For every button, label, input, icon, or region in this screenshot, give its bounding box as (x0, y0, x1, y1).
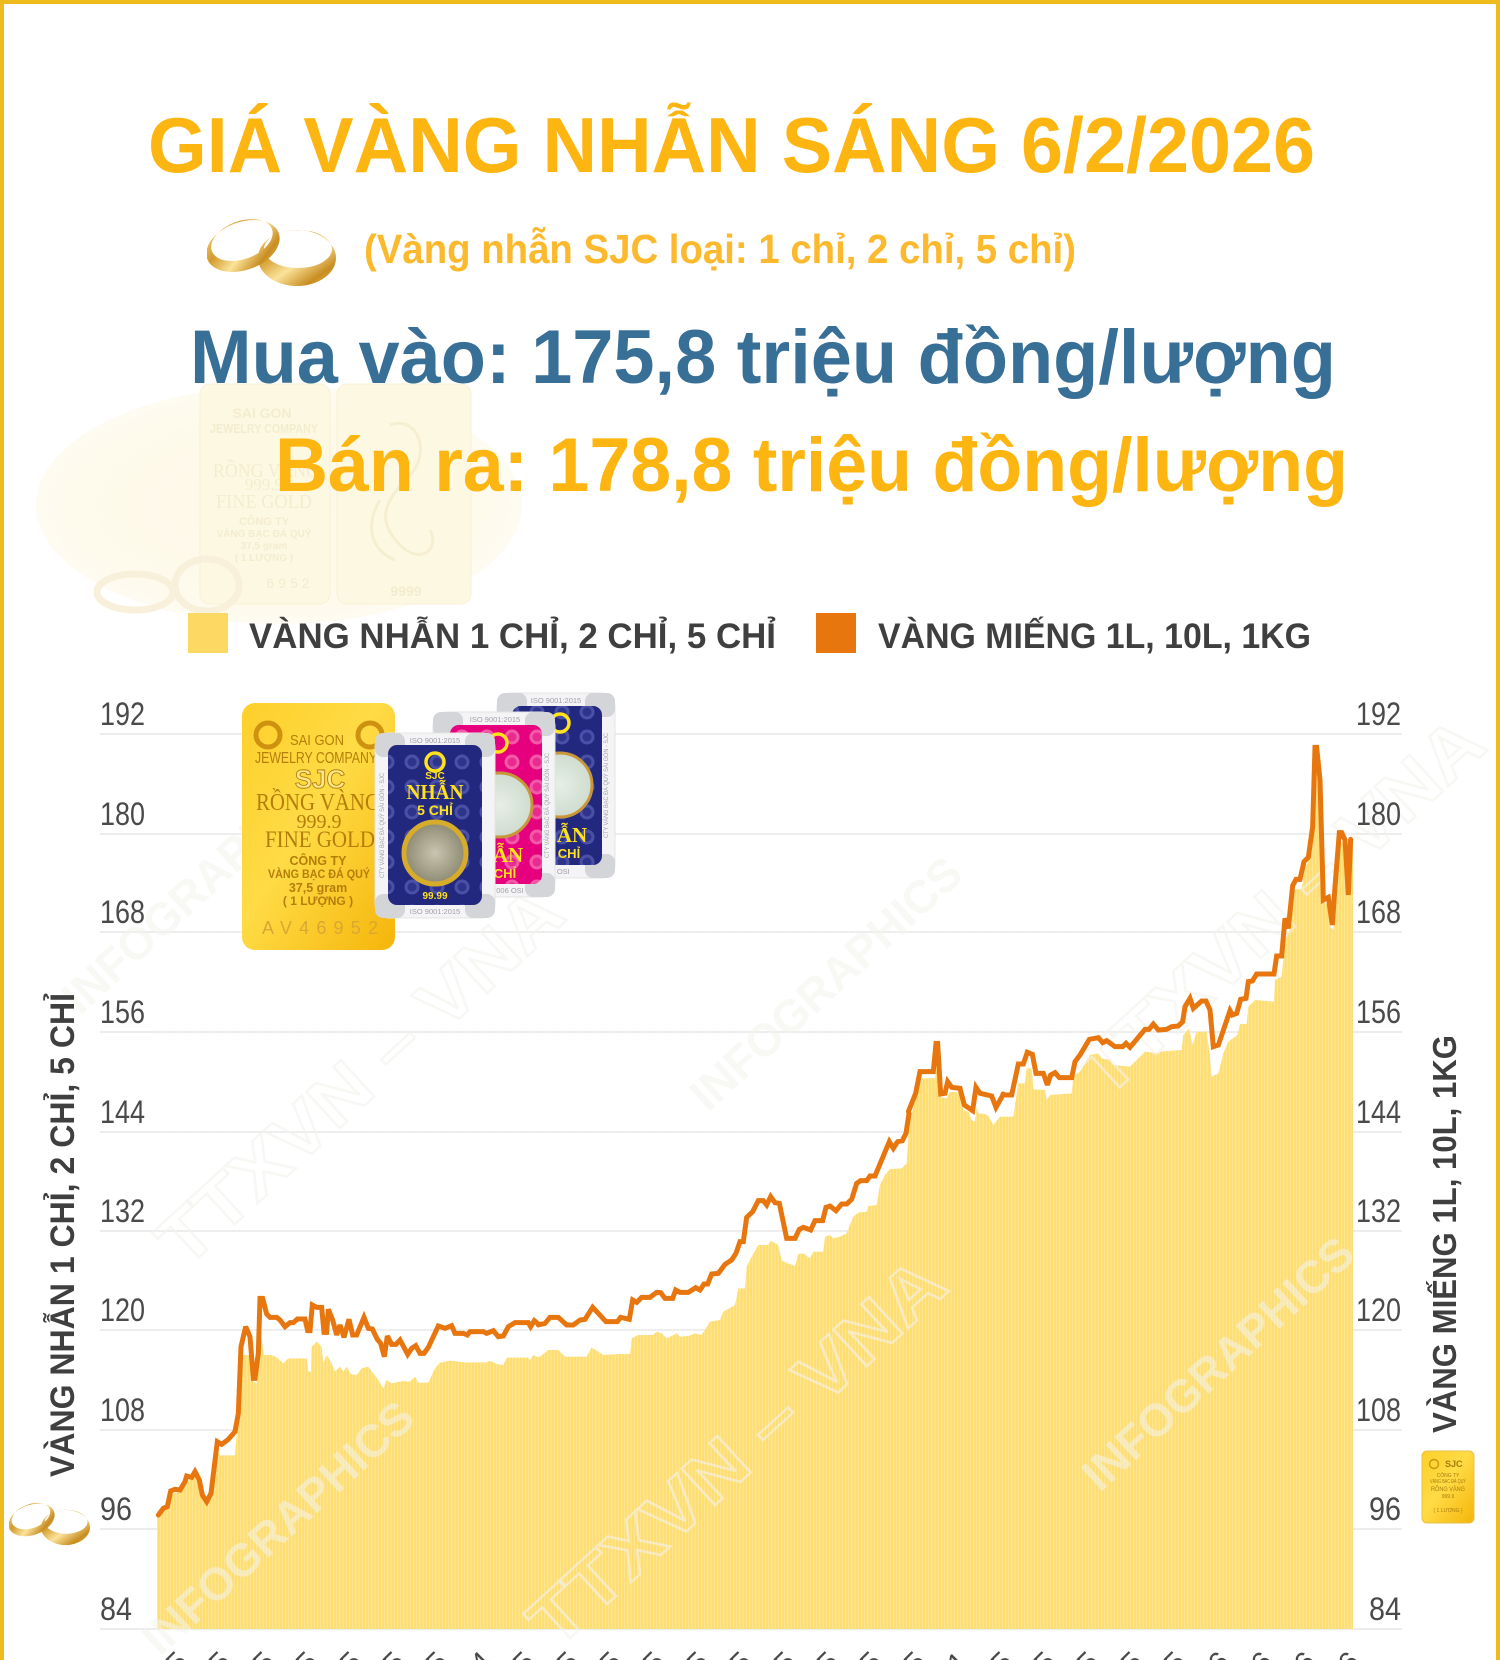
left axis ticks: 120 (100, 1292, 145, 1328)
front ring card 5 chỉ (navy) (375, 733, 495, 918)
legend label: ring gold: VÀNG NHẪN 1 CHỈ, 2 CHỈ, 5 CHỈ (249, 616, 776, 656)
middle ring card (pink): CHỈ (494, 866, 517, 881)
gold bar SJC: SJC (295, 764, 346, 794)
grid lines (100, 734, 1402, 1629)
left axis ticks: 132 (100, 1193, 145, 1229)
gold bar SJC: SAI GON (290, 732, 344, 749)
back ring card (navy): 006 OSI (542, 867, 570, 876)
gold bar SJC: VÀNG BẠC ĐÁ QUÝ (268, 866, 370, 881)
left axis ticks: 156 (100, 994, 145, 1030)
watermarks: INFOGRAPHICS (1072, 1226, 1364, 1500)
right axis ticks: 96 (1369, 1491, 1401, 1527)
legend label: bar gold: VÀNG MIẾNG 1L, 10L, 1KG (878, 616, 1311, 656)
left axis ticks: 144 (100, 1094, 145, 1130)
buy price: Mua vào: 175,8 triệu đồng/lượng (190, 315, 1336, 400)
right axis ticks: 84 (1369, 1591, 1401, 1627)
icon: small gold bar: CÔNG TY (1437, 1472, 1460, 1479)
watermarks: TTXVN – VNA (513, 1242, 961, 1660)
front ring card 5 chỉ (navy): SJC (425, 771, 445, 782)
watermarks: INFOGRAPHICS (680, 846, 972, 1120)
middle ring card (pink): ẪN (493, 842, 523, 867)
gold bar SJC: JEWELRY COMPANY (255, 750, 377, 767)
gold bar SJC: ( 1 LƯỢNG ) (283, 894, 353, 908)
icon: small gold bar: VÀNG BẠC ĐÁ QUÝ (1430, 1478, 1467, 1485)
faded background oval with gold bars and rings: ( 1 LƯỢNG ) (235, 553, 293, 564)
right axis ticks: 144 (1356, 1094, 1401, 1130)
icon: small gold bar (1422, 1451, 1474, 1523)
right axis ticks: 168 (1356, 894, 1401, 930)
right axis ticks: 192 (1356, 696, 1401, 732)
x axis labels (cropped at the page edge) (160, 1646, 1367, 1660)
gold bar SJC: 999.9 (296, 811, 342, 833)
faded background oval with gold bars and rings: 37,5 gram (241, 541, 287, 552)
middle ring card (pink): 006 OSI (496, 886, 524, 895)
back ring card (navy): ẪN (557, 822, 587, 847)
faded background oval with gold bars and rings: SAI GON (232, 405, 292, 421)
faded background oval with gold bars and rings: RỒNG VÀNG (213, 458, 319, 482)
legend swatch: bar gold (816, 613, 856, 653)
left axis ticks: 168 (100, 894, 145, 930)
faded background oval with gold bars and rings: 999.9 (245, 475, 283, 494)
icon: gold rings (199, 210, 336, 286)
line series: bar gold (158, 747, 1351, 1515)
right axis ticks: 120 (1356, 1292, 1401, 1328)
left axis ticks: 84 (100, 1591, 132, 1627)
subtitle: (Vàng nhẫn SJC loại: 1 chỉ, 2 chỉ, 5 chỉ) (364, 226, 1076, 272)
gold bar SJC: CÔNG TY (290, 853, 347, 868)
gold bar SJC (242, 703, 395, 950)
right axis title: VÀNG MIẾNG 1L, 10L, 1KG (1426, 1035, 1463, 1433)
front ring card 5 chỉ (navy): ISO 9001:2015 (410, 736, 460, 745)
legend swatch: ring gold (188, 613, 228, 653)
right axis ticks: 180 (1356, 796, 1401, 832)
gold bar SJC: FINE GOLD (265, 827, 375, 852)
icon: small gold rings (4, 1497, 90, 1545)
chart (52, 696, 1500, 1660)
right axis ticks: 132 (1356, 1193, 1401, 1229)
sell price: Bán ra: 178,8 triệu đồng/lượng (275, 423, 1348, 508)
back ring card (navy): CHỈ (558, 846, 581, 861)
faded background oval with gold bars and rings: FINE GOLD (216, 491, 312, 513)
faded background oval with gold bars and rings: JEWELRY COMPANY (210, 421, 318, 436)
back ring card (navy): ISO 9001:2015 (531, 696, 581, 705)
faded background oval with gold bars and rings: CÔNG TY (239, 515, 290, 528)
faded background oval with gold bars and rings: 9999 (390, 583, 422, 599)
watermarks: INFOGRAPHICS (52, 749, 344, 1023)
legend (188, 613, 1311, 656)
bar series: ring gold (157, 757, 1353, 1629)
left axis title: VÀNG NHẪN 1 CHỈ, 2 CHỈ, 5 CHỈ (44, 993, 82, 1477)
left axis ticks (100, 696, 145, 1627)
right axis ticks: 108 (1356, 1392, 1401, 1428)
watermarks (52, 702, 1500, 1660)
right axis ticks: 156 (1356, 994, 1401, 1030)
icon: small gold bar: ( 1 LƯỢNG ) (1433, 1508, 1463, 1514)
front ring card 5 chỉ (navy): NHẪN (406, 779, 464, 804)
front ring card 5 chỉ (navy): 99.99 (422, 891, 448, 902)
back ring card (navy) (497, 693, 615, 878)
icon: small gold bar: SJC (1445, 1459, 1463, 1469)
faded background oval with gold bars and rings: 6952 (266, 575, 314, 591)
back ring card (navy): CTY VÀNG BẠC ĐÁ QUÝ SÀI GÒN - SJC (603, 732, 610, 838)
watermarks: TTXVN – VNA (142, 872, 579, 1282)
middle ring card (pink): ISO 9001:2015 (470, 715, 520, 724)
left axis ticks: 96 (100, 1491, 132, 1527)
faded background oval with gold bars and rings: VÀNG BẠC ĐÁ QUÝ (216, 527, 312, 540)
left axis ticks: 192 (100, 696, 145, 732)
gold bar SJC: 37,5 gram (289, 881, 347, 895)
front ring card 5 chỉ (navy): CTY VÀNG BẠC ĐÁ QUÝ SÀI GÒN - SJC (379, 772, 386, 878)
title: GIÁ VÀNG NHẪN SÁNG 6/2/2026 (148, 101, 1315, 189)
watermarks: INFOGRAPHICS (132, 1390, 424, 1660)
left axis ticks: 180 (100, 796, 145, 832)
middle ring card (pink): CTY VÀNG BẠC ĐÁ QUÝ SÀI GÒN - SJC (544, 752, 551, 858)
watermarks: TTXVN – VNA (1063, 702, 1500, 1112)
faded background oval with gold bars and rings (36, 384, 522, 624)
right axis ticks (1356, 696, 1401, 1627)
icon: small gold bar: 999.9 (1442, 1494, 1454, 1500)
middle ring card (pink) (433, 712, 555, 897)
front ring card 5 chỉ (navy): ISO 9001:2015 (410, 907, 460, 916)
gold bar SJC: RỒNG VÀNG (256, 789, 380, 816)
icon: small gold bar: RỒNG VÀNG (1431, 1483, 1465, 1493)
front ring card 5 chỉ (navy): 5 CHỈ (417, 802, 453, 818)
gold bar SJC: AV46952 (262, 918, 378, 938)
left axis ticks: 108 (100, 1392, 145, 1428)
